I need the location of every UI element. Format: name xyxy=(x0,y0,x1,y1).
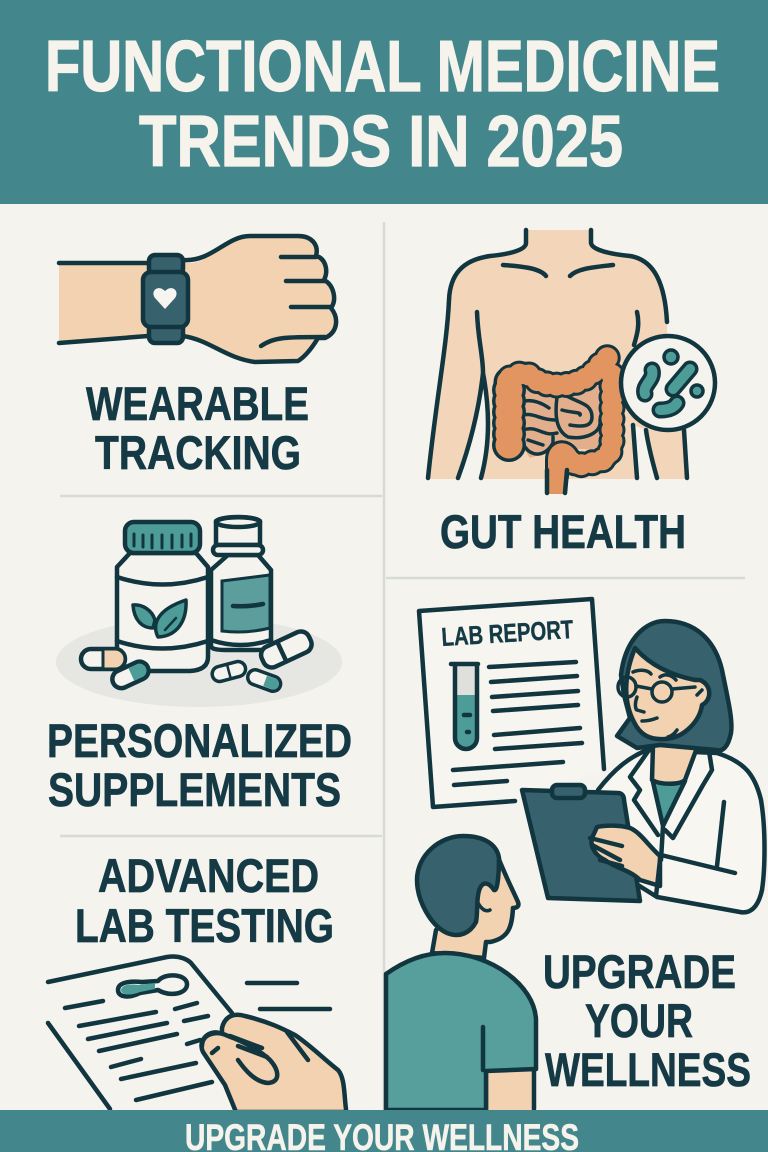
label: upgrade your wellness xyxy=(543,945,751,1096)
icon: doctor with clipboard xyxy=(522,621,764,912)
label: personalized supplements xyxy=(47,714,352,816)
label: upgrade your wellness: YOUR xyxy=(585,994,693,1047)
title xyxy=(45,27,720,182)
icon: lab report sheet xyxy=(419,599,604,807)
label: wearable tracking xyxy=(86,377,309,479)
lab report heading: LAB REPORT xyxy=(441,614,574,652)
icon: torso with gut and microbes xyxy=(428,230,715,494)
icon: supplement bottles and capsules xyxy=(56,517,342,707)
label: wearable tracking: WEARABLE xyxy=(86,377,309,430)
icon: wrist with smartwatch xyxy=(59,236,336,362)
label: advanced lab testing: ADVANCED xyxy=(98,849,319,902)
panel: personalized supplements xyxy=(47,517,352,816)
panel: upgrade your wellness xyxy=(386,599,764,1110)
panel: gut health xyxy=(428,230,715,558)
footer banner xyxy=(0,1110,768,1152)
label: gut health: GUT HEALTH xyxy=(440,505,686,558)
header banner xyxy=(0,0,768,204)
panel: advanced lab testing xyxy=(48,849,346,1112)
label: advanced lab testing: LAB TESTING xyxy=(75,899,334,952)
panel: wearable tracking xyxy=(59,236,336,479)
label: advanced lab testing xyxy=(75,849,334,952)
label: personalized supplements: SUPPLEMENTS xyxy=(48,763,341,816)
icon: patient seen from behind xyxy=(386,836,536,1110)
label: personalized supplements: PERSONALIZED xyxy=(47,714,352,767)
icon: hand holding test report xyxy=(48,957,346,1112)
title: TRENDS IN 2025 xyxy=(139,102,623,182)
label: wearable tracking: TRACKING xyxy=(95,426,301,479)
